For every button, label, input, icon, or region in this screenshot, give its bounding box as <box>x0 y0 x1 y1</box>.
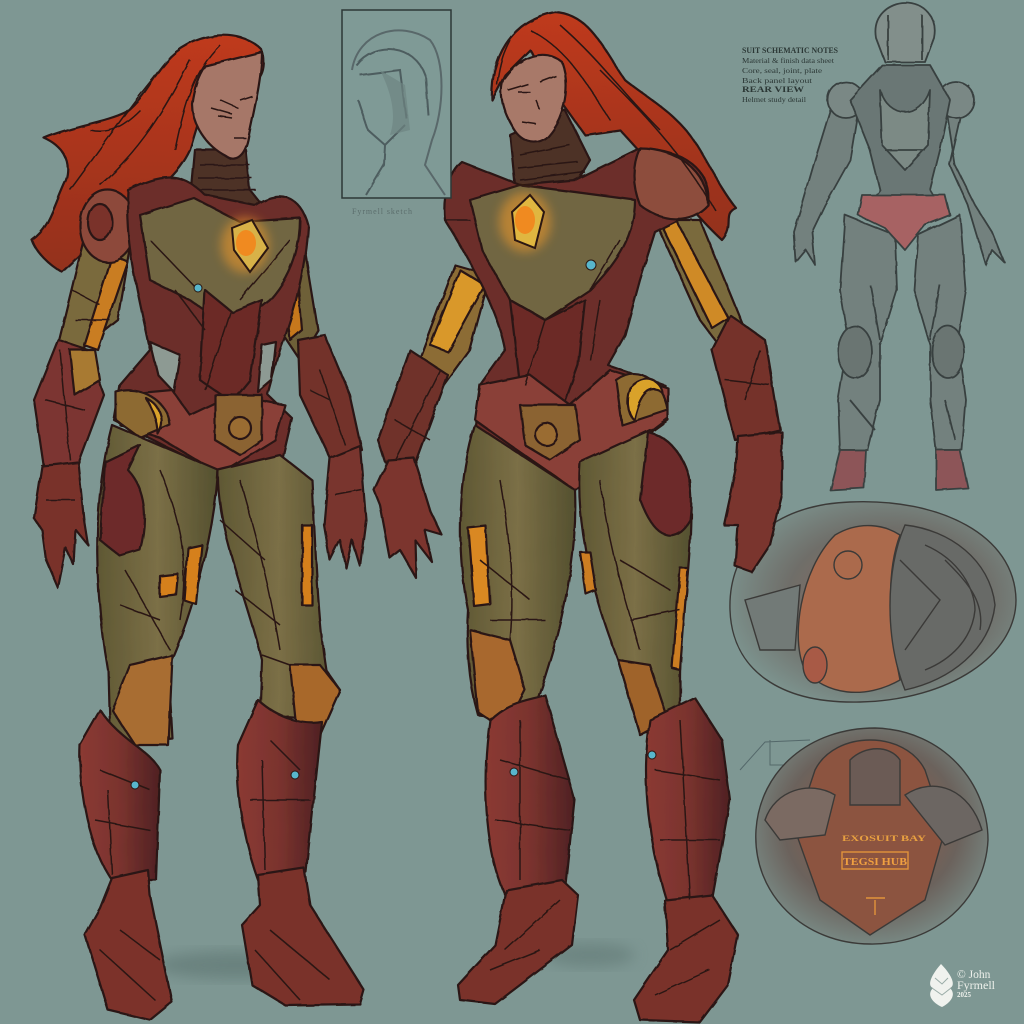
hip pod <box>116 390 170 438</box>
orange leg lights <box>468 526 490 606</box>
signature: Fyrmell <box>957 978 996 992</box>
right leg <box>218 455 364 1005</box>
waist ribs <box>150 342 276 392</box>
face <box>192 52 262 159</box>
hair <box>32 35 264 272</box>
arc reactor: front figure <box>221 217 269 273</box>
captions: design notes: Core, seal, joint, plate <box>742 66 823 75</box>
captions: design notes: SUIT SCHEMATIC NOTES <box>742 45 838 55</box>
hair <box>492 12 736 240</box>
left knee <box>838 326 872 378</box>
helmet study orb: side view <box>730 502 1016 702</box>
captions: design notes: Material & finish data sheet <box>742 56 835 65</box>
left leg <box>458 425 578 1004</box>
figure: front three-quarter view <box>32 35 366 1020</box>
left leg <box>838 215 897 450</box>
neck <box>510 110 590 185</box>
left leg <box>80 425 218 1020</box>
helmet <box>875 3 935 62</box>
buckle ring <box>229 417 251 439</box>
signature: 2025 <box>957 991 972 999</box>
orange leg lights <box>160 525 312 605</box>
back ribs <box>880 90 930 170</box>
right arm <box>655 218 782 572</box>
captions: design notes <box>742 45 838 104</box>
schematic lines <box>740 740 810 770</box>
chest plate <box>140 198 300 330</box>
right arm <box>945 85 1004 265</box>
arc reactor: three-quarter figure <box>499 192 551 252</box>
left shoulder <box>828 82 864 118</box>
ink details: front figure <box>45 45 362 1000</box>
helmet study orb: front view <box>756 728 988 944</box>
captions: design notes: REAR VIEW <box>742 85 804 94</box>
torso <box>444 148 708 490</box>
center torso <box>200 290 262 402</box>
right arm <box>272 232 366 568</box>
center torso <box>510 300 585 402</box>
back torso <box>850 65 950 215</box>
blue lights: three-quarter figure <box>510 260 656 776</box>
ground shadow: front figure <box>155 951 315 979</box>
right leg <box>579 430 738 1022</box>
signature: © John <box>957 969 991 981</box>
left arm <box>374 265 490 578</box>
logo: white pinecone <box>930 964 953 1007</box>
left arm <box>794 85 860 265</box>
buckle ring <box>535 423 557 445</box>
right shoulder <box>938 82 974 118</box>
glowing inscription <box>842 852 908 915</box>
ink details: three-quarter figure <box>395 25 770 995</box>
figure: three-quarter view facing left <box>374 12 782 1022</box>
chest plate <box>470 185 635 320</box>
left arm <box>34 190 136 588</box>
captions: design notes: Back panel layout <box>742 76 813 85</box>
belt <box>475 370 668 490</box>
back view figure: grey armor <box>794 3 1004 490</box>
hip crescent <box>627 379 662 420</box>
neck <box>190 150 262 205</box>
boots <box>830 450 968 490</box>
face <box>501 55 566 142</box>
hip pod <box>616 374 668 425</box>
helmet study orb: front view: TEGSI HUB <box>843 856 908 868</box>
blue lights: front figure <box>131 284 299 789</box>
captions: design notes: Helmet study detail <box>742 95 806 104</box>
helmet study orb: front view: EXOSUIT BAY <box>842 834 926 843</box>
pelvis <box>858 195 950 250</box>
hip crescent <box>146 398 162 434</box>
right leg <box>914 215 966 450</box>
concept sketch panel: helmet head <box>342 10 451 198</box>
signature <box>957 969 996 999</box>
right knee <box>932 326 964 378</box>
belt <box>118 390 285 474</box>
ground shadow: three-quarter figure <box>545 943 635 967</box>
torso <box>114 178 308 475</box>
shoulder pad <box>634 148 708 219</box>
belt buckle <box>520 405 580 460</box>
sketch caption: Fyrmell sketch <box>352 207 412 216</box>
belt buckle <box>215 395 262 455</box>
